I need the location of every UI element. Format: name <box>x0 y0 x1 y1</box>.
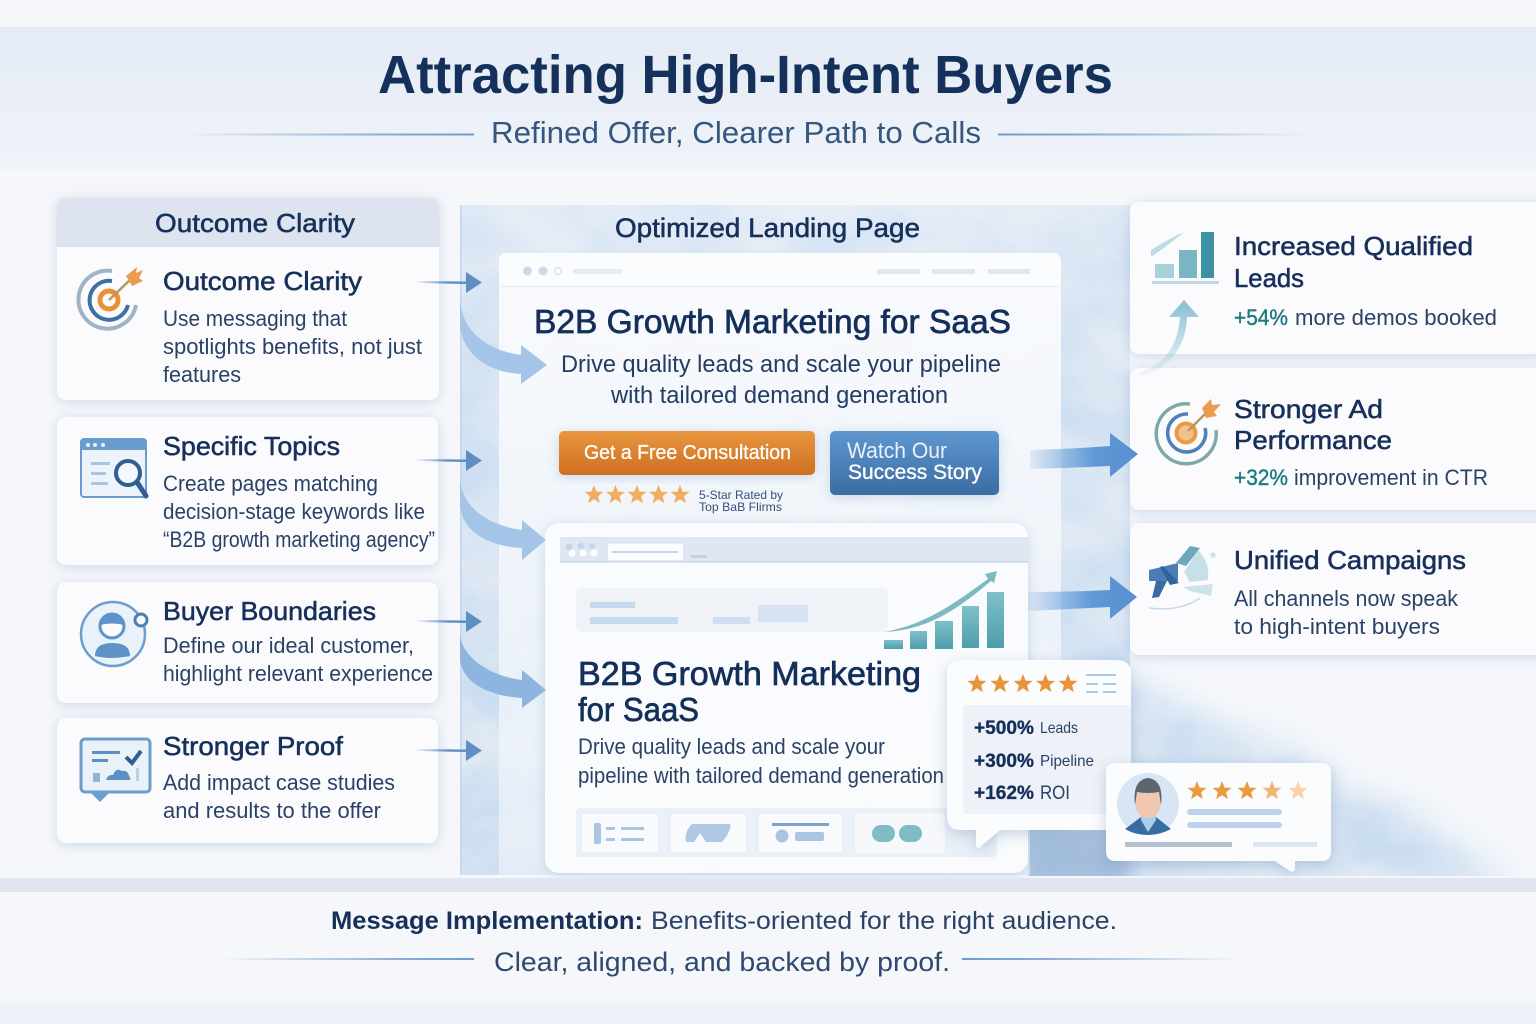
panel: page preview <box>545 523 1028 873</box>
subtitle: Refined Offer, Clearer Path to Calls <box>491 115 981 150</box>
stat: roi: +162% <box>974 783 1034 804</box>
arrow: up to leads <box>1138 300 1199 376</box>
rating text: 5-Star Rated by <box>699 488 783 502</box>
watercolor backdrop <box>460 205 1536 890</box>
footer tagline: Clear, aligned, and backed by proof. <box>494 947 950 977</box>
panel: optimized landing page heading: Optimized Landing Page <box>615 213 920 243</box>
icon: buyer <box>81 602 147 666</box>
feature tiles <box>576 808 997 857</box>
card text: specific topics: “B2B growth marketing agency” <box>163 527 435 552</box>
arrow: topics to page <box>415 450 482 471</box>
card text: outcome clarity: features <box>163 362 241 387</box>
card text: leads: +54% <box>1234 305 1288 330</box>
panel: unified campaigns card <box>1130 523 1536 655</box>
icon: target <box>1156 399 1221 464</box>
button: free consultation: Get a Free Consultation <box>584 442 791 464</box>
rating stars <box>584 485 690 503</box>
preview subhead <box>578 734 944 788</box>
card text: outcome clarity: Outcome Clarity <box>163 266 362 296</box>
curved arrow: middle <box>460 480 546 560</box>
panel: increased qualified leads card <box>1130 202 1536 354</box>
stat: leads: +500% <box>974 718 1034 739</box>
preview headline <box>578 655 921 728</box>
bar chart: growth <box>884 571 1004 649</box>
panel: left header and outcome clarity card <box>57 198 439 400</box>
card text: buyer boundaries <box>163 596 433 686</box>
stat: roi <box>974 783 1070 804</box>
card text: leads: more demos booked <box>1295 305 1497 330</box>
panel: stronger ad performance card <box>1130 368 1536 510</box>
card text: buyer boundaries: Buyer Boundaries <box>163 596 376 626</box>
popup stars <box>967 674 1078 692</box>
panel: stronger proof card <box>57 718 438 843</box>
icon: megaphone <box>1149 546 1217 609</box>
stat: leads: Leads <box>1040 720 1078 737</box>
card text: leads: Leads <box>1234 263 1304 293</box>
icon: search page <box>81 439 146 497</box>
icon: proof <box>81 739 150 802</box>
card text: stronger proof: Add impact case studies <box>163 770 395 795</box>
button: success story: Success Story <box>848 461 982 484</box>
stat: pipeline <box>974 751 1094 772</box>
panel: landing page browser <box>499 253 1061 875</box>
card text: buyer boundaries: Define our ideal customer, <box>163 633 414 658</box>
avatar <box>1117 773 1179 835</box>
curved arrow: lower <box>460 635 546 708</box>
card text: specific topics: decision-stage keywords like <box>163 499 425 524</box>
card text: buyer boundaries: highlight relevant experience <box>163 661 433 686</box>
card text: leads <box>1234 231 1497 330</box>
arrow: outcome to page <box>415 272 482 293</box>
review stars <box>1187 781 1308 799</box>
icon: target <box>78 267 143 329</box>
arrow: buyer to page <box>415 611 482 632</box>
button: success story <box>830 431 999 495</box>
panel: buyer boundaries card <box>57 582 438 703</box>
button: free consultation <box>559 431 815 475</box>
card text: ad performance: Stronger Ad <box>1234 394 1383 424</box>
footer message: Benefits-oriented for the right audience. <box>651 907 1117 935</box>
card text: stronger proof: Stronger Proof <box>163 731 344 761</box>
card text: campaigns <box>1234 545 1466 639</box>
curved arrow: upper <box>460 300 547 384</box>
preview headline: B2B Growth Marketing <box>578 655 921 692</box>
title banner <box>0 27 1536 170</box>
card text: leads: Increased Qualified <box>1234 231 1473 261</box>
card text: outcome clarity: Use messaging that <box>163 306 347 331</box>
card text: ad performance: Performance <box>1234 425 1392 455</box>
arrow: page to campaigns <box>1028 576 1137 619</box>
card text: ad performance: improvement in CTR <box>1294 465 1488 490</box>
stat: roi: ROI <box>1040 783 1070 804</box>
footer message <box>331 907 1117 935</box>
preview subhead: Drive quality leads and scale your <box>578 734 885 759</box>
arrow: proof to page <box>415 740 482 761</box>
card text: specific topics <box>163 431 435 552</box>
card text: campaigns: All channels now speak <box>1234 586 1459 611</box>
card text: outcome clarity <box>163 266 422 387</box>
review card <box>1106 763 1331 872</box>
card text: stronger proof <box>163 731 395 823</box>
card text: specific topics: Specific Topics <box>163 431 340 461</box>
stat: pipeline: Pipeline <box>1040 753 1094 770</box>
card text: campaigns: Unified Campaigns <box>1234 545 1466 575</box>
landing page headline: B2B Growth Marketing for SaaS <box>534 303 1011 340</box>
button: success story: Watch Our <box>847 438 947 463</box>
card text: outcome clarity: spotlights benefits, not just <box>163 334 422 359</box>
landing page subhead <box>561 351 1001 409</box>
title: Attracting High-Intent Buyers <box>378 45 1113 105</box>
stats popup <box>947 660 1131 848</box>
card text: stronger proof: and results to the offer <box>163 798 381 823</box>
preview headline: for SaaS <box>578 691 699 728</box>
card text: specific topics: Create pages matching <box>163 471 378 496</box>
arrow: page to ad performance <box>1030 433 1138 477</box>
left heading: Outcome Clarity <box>155 208 355 238</box>
icon: bars <box>1151 232 1219 284</box>
panel: specific topics card <box>57 417 438 565</box>
preview subhead: pipeline with tailored demand generation <box>578 763 944 788</box>
footer message: Message Implementation: <box>331 907 643 935</box>
stat: pipeline: +300% <box>974 751 1034 772</box>
rating text <box>699 488 783 514</box>
card text: campaigns: to high-intent buyers <box>1234 614 1440 639</box>
landing page subhead: Drive quality leads and scale your pipeline <box>561 351 1001 378</box>
card text: ad performance: +32% <box>1234 465 1288 490</box>
card text: ad performance <box>1234 394 1488 490</box>
stat: leads <box>974 718 1078 739</box>
landing page subhead: with tailored demand generation <box>610 382 948 409</box>
rating text: Top BaB Flirms <box>699 500 782 514</box>
footer banner <box>0 878 1536 1024</box>
